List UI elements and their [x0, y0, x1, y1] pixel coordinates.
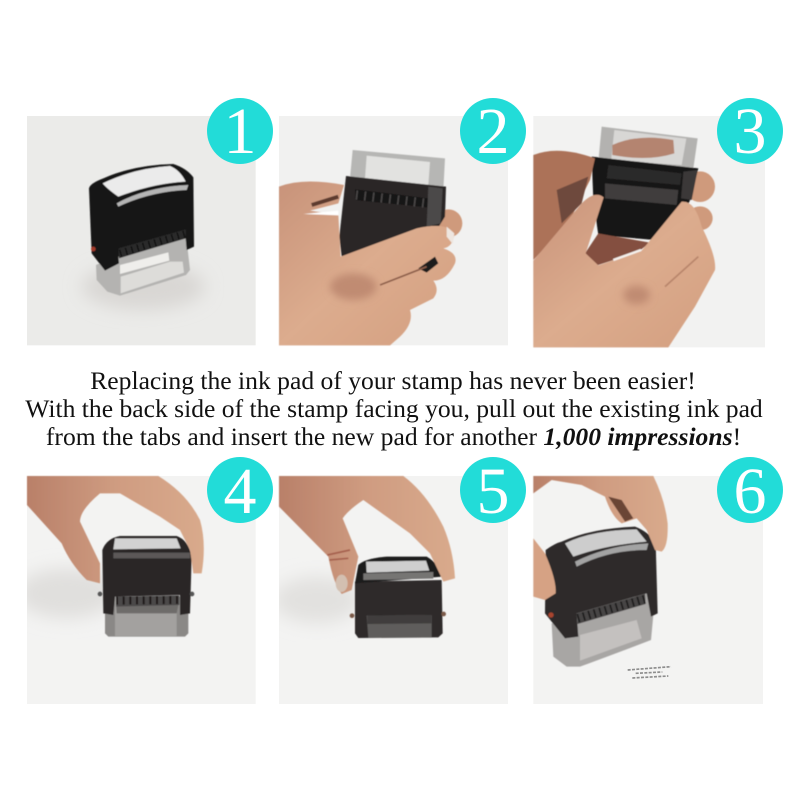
- text block: instructions: [25, 366, 763, 451]
- panel: step 2 photo: [279, 116, 508, 345]
- icon: stamp at rest: [89, 164, 194, 296]
- number badge 3: 3: [734, 95, 766, 168]
- icon: hand pressing stamp, back view: [27, 476, 204, 637]
- icon: hand pressing closed stamp: [279, 476, 455, 638]
- text block: instructions: Replacing the ink pad of your stamp has never been easier!: [90, 366, 696, 395]
- panel: step 1 photo: [27, 116, 256, 345]
- number badge 6: 6: [734, 455, 766, 528]
- number badge 2: 2: [476, 95, 510, 168]
- icon: hands replacing ink pad: [533, 127, 715, 347]
- hand shading: [330, 273, 377, 300]
- panel: step 3 photo: [533, 116, 765, 347]
- number badge 6: [717, 455, 783, 528]
- icon: stamp with printed impression: [533, 476, 668, 667]
- number badge 1: [207, 95, 273, 168]
- text block: instructions: With the back side of the stamp facing you, pull out the existing ink pad: [25, 394, 763, 423]
- hand shading: [623, 286, 650, 304]
- number badge 3: [717, 95, 783, 168]
- panel: step 5 photo: [273, 476, 508, 704]
- number badge 2: [460, 95, 526, 168]
- number badge 5: 5: [476, 455, 510, 528]
- text block: instructions: from the tabs and insert the new pad for another 1,000 impressions!: [46, 422, 741, 451]
- printed impression marks: [628, 667, 671, 678]
- stamp shadow: [82, 263, 205, 310]
- table shadow: [27, 566, 103, 620]
- panel: step 6 photo: [533, 476, 763, 704]
- table shadow: [273, 577, 360, 623]
- number badge 4: [207, 455, 273, 528]
- number badge 5: [460, 455, 526, 528]
- number badge 1: 1: [224, 95, 256, 168]
- icon: hand pulling stamp apart: [279, 150, 462, 345]
- number badge 4: 4: [224, 455, 256, 528]
- panel: step 4 photo: [17, 476, 256, 704]
